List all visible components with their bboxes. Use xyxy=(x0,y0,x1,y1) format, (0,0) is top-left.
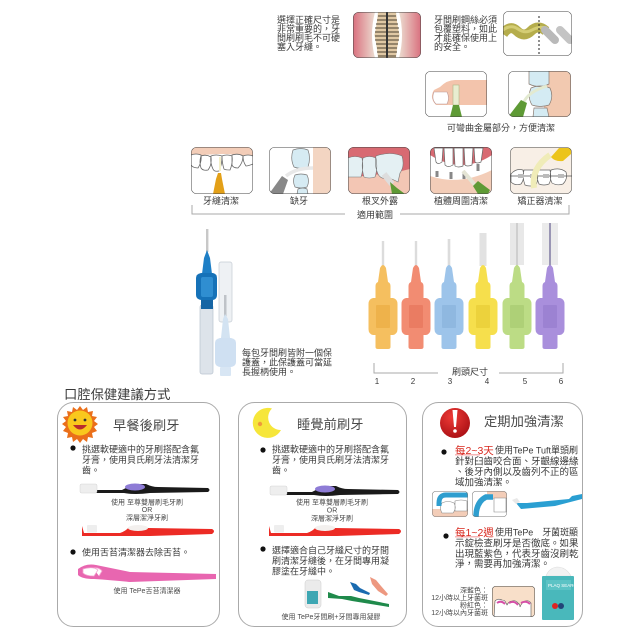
text: choose correct size: 間刷刷毛不可硬 xyxy=(277,32,340,43)
brush size 5 xyxy=(502,223,532,349)
bullet text: plaque tablets: 淨，需要再加強清潔。 xyxy=(455,558,550,570)
label: braces: 矯正器清潔 xyxy=(517,195,563,206)
caption: toothbrush options: OR xyxy=(142,507,152,514)
bullet text: tongue cleaner: 使用舌苔清潔器去除舌苔。 xyxy=(82,546,190,558)
text: choose correct size: 塞入牙縫。 xyxy=(277,41,322,52)
black toothbrush xyxy=(270,486,400,496)
legend: plaque colours xyxy=(431,586,488,617)
caption: toothbrush options: 深層潔淨牙刷 xyxy=(311,514,353,522)
size numbers: 5 xyxy=(523,377,528,386)
bullet text: Tuft brush: 域加強清潔。 xyxy=(455,476,512,488)
bullet text: plaque tablets: 示錠檢查刷牙是否徹底。如果 xyxy=(455,538,579,550)
text: protective cap note xyxy=(242,347,332,377)
orange interdental brush xyxy=(370,577,388,596)
bullet text: Tuft brush: 每2~3天 xyxy=(455,444,494,457)
brush size 6 xyxy=(536,223,564,349)
light-blue brush in cap xyxy=(215,295,236,376)
legend: plaque colours: 12小時以內牙菌斑 xyxy=(431,608,488,617)
size numbers: 3 xyxy=(448,377,453,386)
black toothbrush xyxy=(80,484,210,494)
size numbers: 2 xyxy=(411,377,416,386)
caption: toothbrush options xyxy=(111,498,183,522)
size numbers: 6 xyxy=(559,377,564,386)
bullet xyxy=(260,546,266,552)
blue brush xyxy=(196,229,217,309)
bullet text: toothbrush: 牙膏，使用貝氏刷牙法清潔牙 xyxy=(272,454,389,465)
size numbers: 1 xyxy=(375,377,380,386)
icon: missing tooth xyxy=(269,147,331,194)
brush size 3 xyxy=(434,239,464,349)
size numbers: 4 xyxy=(485,377,490,386)
text: wire coated with plastic: 牙間刷鋼絲必須 xyxy=(434,14,497,25)
bullet text: toothbrush: 牙膏，使用貝氏刷牙法清潔牙 xyxy=(82,454,199,465)
bullet xyxy=(441,449,447,455)
pink tongue cleaner xyxy=(78,564,216,582)
caption: tongue cleaner: 使用 TePe舌苔清潔器 xyxy=(114,586,180,595)
bracket: applicable range xyxy=(192,205,569,214)
heading: 早餐後刷牙 xyxy=(113,418,179,433)
bullet xyxy=(260,447,266,453)
underline xyxy=(455,536,480,538)
bullet text: plaque tablets xyxy=(455,526,579,570)
text: wire coated with plastic: 的安全。 xyxy=(434,41,470,52)
panel: periodic cleaning xyxy=(422,402,582,626)
caption: toothbrush options: 深層潔淨牙刷 xyxy=(126,513,168,522)
brush size 4 xyxy=(468,233,498,349)
text: wire coated with plastic xyxy=(434,14,497,52)
label: brush head size: 刷頭尺寸 xyxy=(452,366,488,377)
bullet text: toothbrush xyxy=(272,444,389,476)
bullet text: Tuft brush: 針對臼齒咬合面、牙齦線邊緣 xyxy=(455,456,579,468)
heading: 睡覺前刷牙 xyxy=(297,416,363,432)
bullet text: interdental gel: 刷清潔牙縫後，在牙間專用凝 xyxy=(272,555,389,566)
text: choose correct size xyxy=(277,14,340,52)
legend: plaque colours: 粉紅色： xyxy=(460,600,488,610)
text: protective cap note: 每包牙間刷皆附一個保 xyxy=(242,347,332,358)
brush size 1 xyxy=(368,241,398,349)
caption: toothbrush options: OR xyxy=(327,508,337,514)
text: protective cap note: 長握柄使用。 xyxy=(242,366,296,377)
caption: toothbrush options: 使用 至尊雙層刷毛牙刷 xyxy=(296,498,368,506)
blue tuft brush xyxy=(512,494,582,509)
text: wire coated with plastic: 包覆塑料，如此 xyxy=(434,23,497,34)
legend: plaque colours: 深藍色： xyxy=(460,586,488,594)
label: implants: 植體周圍清潔 xyxy=(434,195,488,206)
bullet text: Tuft brush: 使用TePe Tuft單頭刷 xyxy=(495,444,578,456)
underline xyxy=(455,454,480,456)
bracket: brush head size xyxy=(374,363,563,373)
icon: alert xyxy=(440,408,470,438)
bullet text: plaque tablets: 出現藍紫色，代表牙齒沒刷乾 xyxy=(455,548,579,560)
bullet text: Tuft brush: 、後牙內側以及齒列不正的區 xyxy=(455,466,579,478)
bullet text: toothbrush: 齒。 xyxy=(272,466,290,476)
icon: moon xyxy=(253,408,281,438)
icon: orthodontic cleaning xyxy=(510,147,572,194)
bullet xyxy=(70,445,76,451)
bullet xyxy=(70,549,76,555)
icon: bending wire with fingers xyxy=(425,71,487,117)
bullet text: toothbrush: 齒。 xyxy=(82,466,100,476)
icon: interdental cleaning xyxy=(191,147,253,194)
label: applicable range: 適用範圍 xyxy=(357,209,393,220)
green interdental brush xyxy=(328,592,389,607)
bullet text: toothbrush: 挑選軟硬適中的牙刷搭配含氟 xyxy=(272,444,389,454)
icon: tuft brush inner side xyxy=(472,491,507,517)
bullet text: plaque tablets: 使用TePe 牙菌斑顯 xyxy=(495,526,578,538)
protective cap xyxy=(219,262,232,322)
bullet text: toothbrush xyxy=(82,444,199,476)
caption: bendable metal: 可彎曲金屬部分，方便清潔 xyxy=(447,122,555,133)
bullet text: plaque tablets: 每1~2週 xyxy=(455,526,494,539)
label: interdental: 牙縫清潔 xyxy=(203,195,239,206)
panel: after breakfast xyxy=(58,402,220,626)
label: missing tooth: 缺牙 xyxy=(290,195,308,206)
icon: sun xyxy=(62,406,98,443)
section title: 口腔保健建議方式 xyxy=(64,387,170,402)
panel: before bed xyxy=(238,402,406,626)
legend: plaque colours: 12小時以上牙菌斑 xyxy=(431,593,488,602)
bullet text: interdental gel xyxy=(272,544,389,576)
text: choose correct size: 非常重要的，牙 xyxy=(277,23,340,34)
bullet text: toothbrush: 挑選軟硬適中的牙刷搭配含氟 xyxy=(82,444,199,454)
label: furcation: 根叉外露 xyxy=(362,195,398,206)
blue interdental brush xyxy=(350,582,370,595)
icon: exposed furcation xyxy=(348,147,410,194)
heading: 定期加強清潔 xyxy=(484,414,564,429)
bullet text: interdental gel: 膠塗在牙縫中。 xyxy=(272,566,335,576)
icon: coated twisted wire xyxy=(503,11,572,56)
bullet text: interdental gel: 選擇適合自己牙縫尺寸的牙間 xyxy=(272,544,389,556)
size numbers xyxy=(375,377,564,386)
caption: gel: 使用 TePe牙間刷+牙間專用凝膠 xyxy=(282,612,380,621)
brush size 2 xyxy=(402,241,430,349)
icon: tuft brush on molars xyxy=(432,491,468,517)
bullet xyxy=(443,533,449,539)
clear handle xyxy=(200,305,213,374)
icon: brush fitted between teeth xyxy=(353,12,421,58)
plaque tablet package xyxy=(542,567,580,620)
text: protective cap note: 護蓋，此保護蓋可當延 xyxy=(242,356,332,368)
gel bottle xyxy=(305,580,321,608)
caption: toothbrush options: 使用 至尊雙層刷毛牙刷 xyxy=(111,498,183,506)
red toothbrush xyxy=(269,525,401,536)
icon: around implants xyxy=(430,147,492,194)
bullet text: Tuft brush xyxy=(455,444,579,488)
text: wire coated with plastic: 才能確保使用上 xyxy=(434,32,497,43)
icon: bent brush on molar xyxy=(508,71,571,117)
text: choose correct size: 選擇正確尺寸是 xyxy=(277,14,340,25)
caption: toothbrush options xyxy=(296,498,368,522)
icon: stained teeth xyxy=(492,586,535,617)
red toothbrush xyxy=(82,525,214,536)
plaque tablet package: PLAQ SEARCH xyxy=(548,583,580,588)
